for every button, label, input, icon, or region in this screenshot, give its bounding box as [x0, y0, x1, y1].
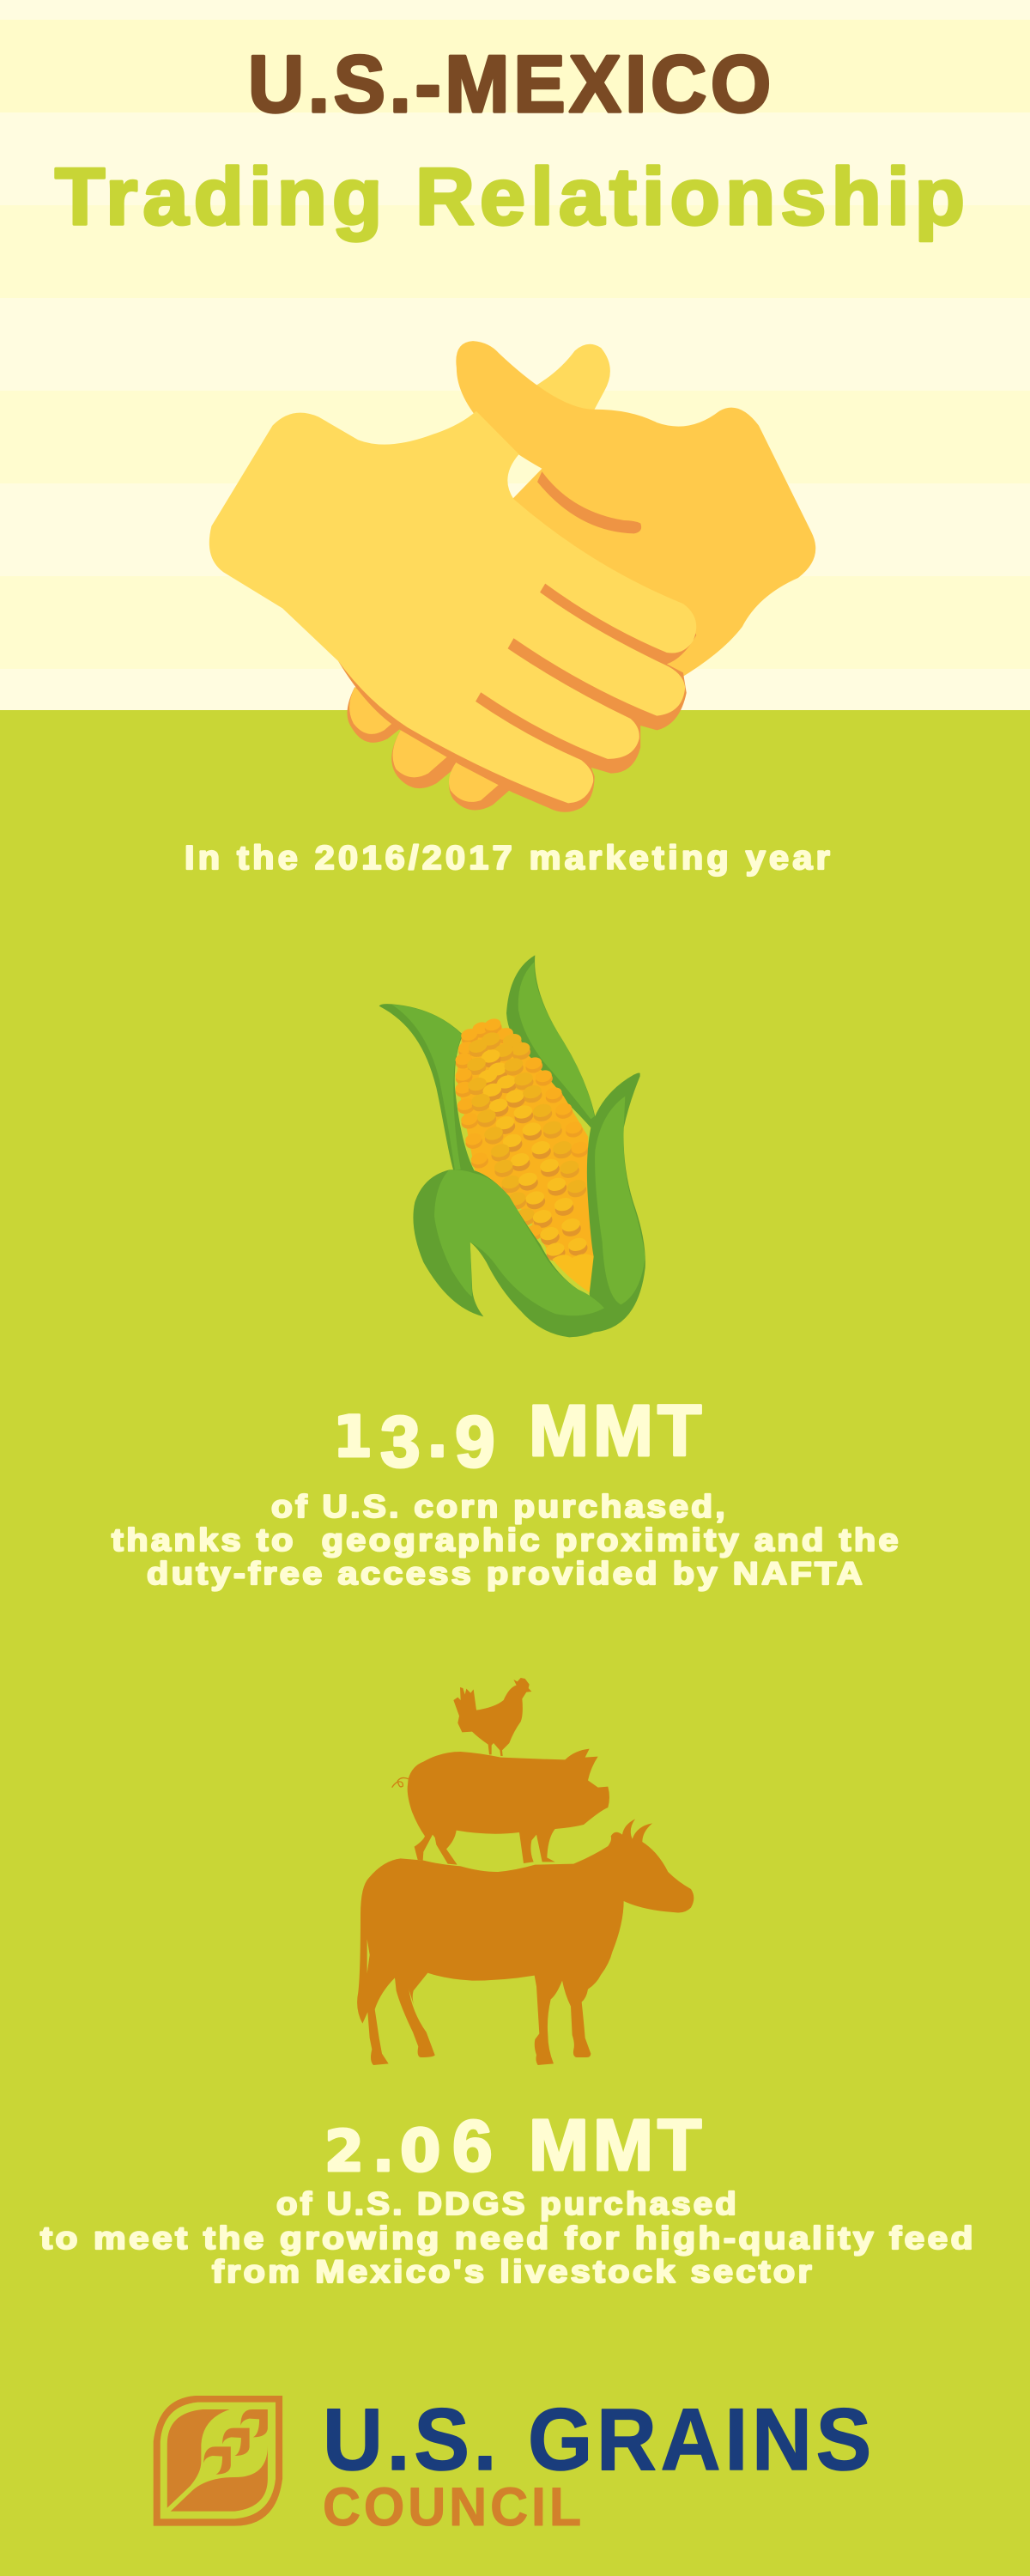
- stat: 13.9 MMT: 3: [380, 1401, 421, 1482]
- text: DDGS description: to meet the growing need for high-quality feed: [40, 2221, 976, 2256]
- stat: 13.9 MMT: 9: [455, 1401, 495, 1482]
- logo sub-wordmark: COUNCIL: [323, 2477, 585, 2537]
- logo mark: leaf emblem: [154, 2396, 282, 2526]
- right leaf: [587, 1072, 645, 1333]
- logo wordmark: U.S. GRAINS: [323, 2391, 876, 2488]
- subtitle: Trading Relationship: Trading Relationship: [55, 151, 970, 241]
- icon: ear of corn: [379, 955, 645, 1337]
- kernels: [454, 1017, 594, 1292]
- stat: 2.06 MMT: MMT: [529, 2105, 706, 2185]
- cob: [457, 1019, 594, 1292]
- left leaf: [379, 1004, 475, 1172]
- logo: U.S. Grains Council: [154, 2391, 876, 2537]
- back leaf: [506, 955, 595, 1127]
- text: DDGS description: of U.S. DDGS purchased: [276, 2186, 739, 2221]
- chicken: [453, 1678, 531, 1756]
- bottom leaf: [413, 1170, 606, 1337]
- title: U.S.-MEXICO: U.S.-MEXICO: [248, 39, 775, 129]
- text: corn description: of U.S. corn purchased,: [271, 1489, 728, 1524]
- stat: 2.06 MMT: 2: [324, 2118, 364, 2184]
- thumb crease: [537, 471, 641, 533]
- front hand: [209, 411, 696, 803]
- stat: 13.9 MMT: 1: [333, 1404, 373, 1470]
- left hand thumb behind: [476, 344, 610, 460]
- text: DDGS description: [40, 2186, 976, 2289]
- cow: [357, 1819, 694, 2065]
- background: striped cream header: [0, 0, 1030, 710]
- text: marketing year: In the 2016/2017 marketing year: [185, 840, 833, 877]
- background: lime green panel: [0, 710, 1030, 2576]
- stat: 2.06 MMT: 6: [452, 2105, 493, 2186]
- text: corn description: duty-free access provided by NAFTA: [147, 1556, 865, 1591]
- pig: [392, 1749, 609, 1865]
- icon: handshake: [209, 341, 815, 812]
- back fingers: [348, 687, 522, 810]
- stat: 13.9 MMT: .: [427, 1404, 448, 1470]
- stat: 13.9 MMT: MMT: [529, 1390, 706, 1471]
- text: DDGS description: from Mexico's livestock sector: [212, 2254, 815, 2289]
- text: corn description: thanks to geographic proximity and the: [112, 1522, 901, 1558]
- right hand: [456, 341, 815, 678]
- text: corn description: [112, 1489, 901, 1591]
- icon: chicken, pig and cow silhouette stack: [357, 1678, 694, 2065]
- stat: 2.06 MMT: .: [373, 2118, 394, 2184]
- stat: 2.06 MMT: 0: [400, 2117, 440, 2185]
- finger shadows: [338, 580, 696, 812]
